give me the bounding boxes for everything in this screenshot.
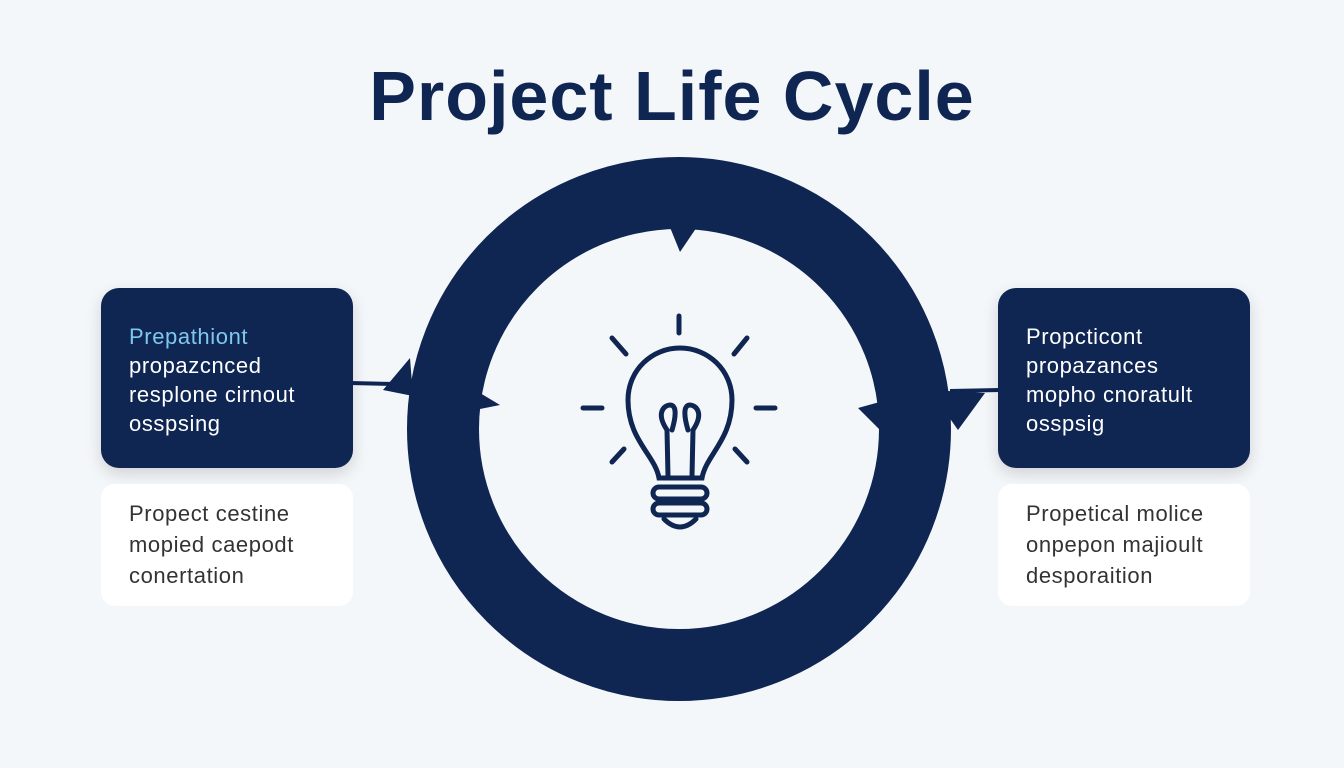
panel: right: osspsig (1026, 411, 1105, 436)
connector right (930, 390, 1000, 430)
arrow notch left (450, 375, 500, 415)
text: right description: desporaition (1026, 563, 1153, 588)
text: left description (101, 484, 353, 606)
text: right description: onpepon majioult (1026, 532, 1203, 557)
panel: right (998, 288, 1250, 468)
text: left description: Propect cestine (129, 501, 290, 526)
text: right description (998, 484, 1250, 606)
arrow notch bottom (485, 545, 510, 585)
text: left description: conertation (129, 563, 244, 588)
panel: left: osspsing (129, 411, 221, 436)
connector left (350, 358, 413, 396)
panel: left: propazcnced (129, 353, 262, 378)
panel: right: mopho cnoratult (1026, 382, 1193, 407)
title: Project Life Cycle (369, 57, 975, 135)
panel: left: Prepathiont (129, 324, 248, 349)
panel: right: Propcticont (1026, 324, 1143, 349)
icon: lightbulb (583, 316, 775, 527)
panel: right: propazances (1026, 353, 1159, 378)
arrow notch right (858, 395, 905, 430)
text: left description: mopied caepodt (129, 532, 294, 557)
ring (443, 193, 915, 665)
panel: left: resplone cirnout (129, 382, 295, 407)
text: right description: Propetical molice (1026, 501, 1204, 526)
panel: left (101, 288, 353, 468)
arrow notch top (665, 215, 705, 252)
